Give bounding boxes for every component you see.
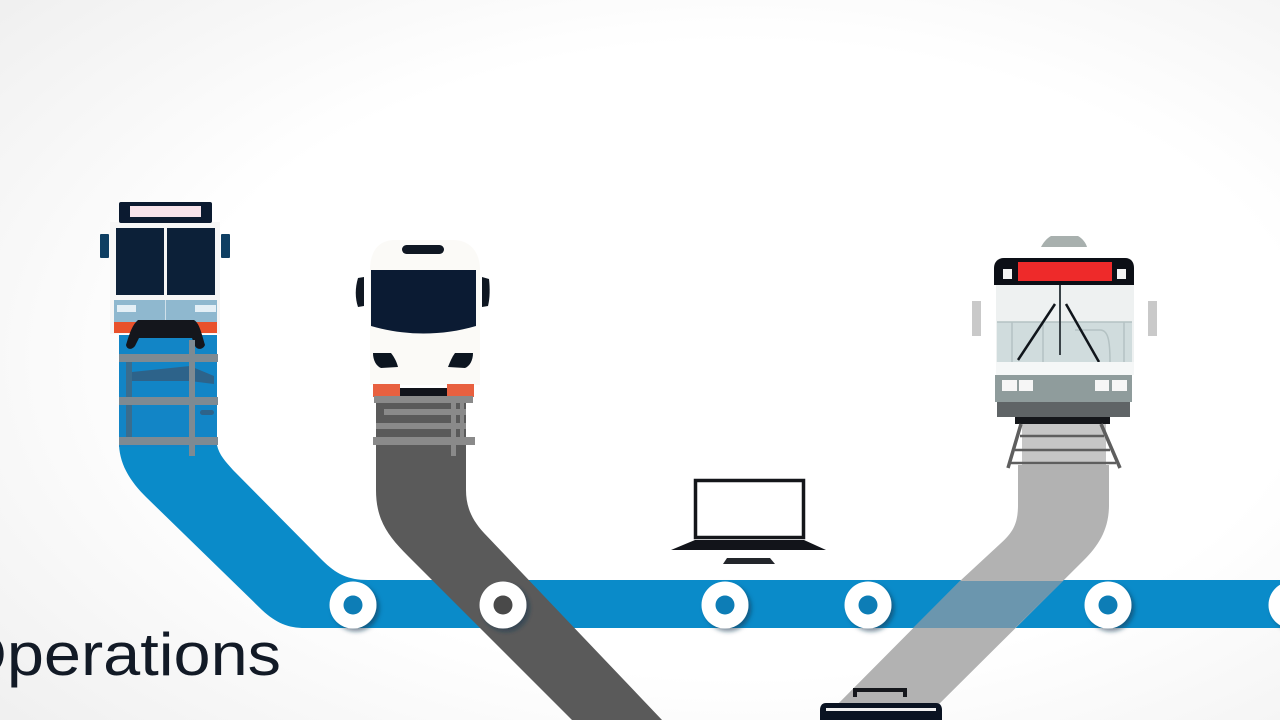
destination sign [119,202,212,223]
route: light grey line [822,424,1109,720]
icon: white coach [356,240,490,456]
station: stop 4 [844,582,892,628]
icon: blue bus [100,202,230,456]
lower panel [114,300,217,322]
front panel [995,375,1132,402]
roof sign [402,245,444,254]
windscreen [371,270,476,334]
headlights [373,353,473,368]
track [1008,424,1120,468]
station: stop 1 [330,582,376,628]
destination sign [994,258,1134,285]
side mirrors [972,301,1157,336]
mirrors [356,277,490,307]
track ties [373,396,475,456]
icon: laptop [671,480,826,564]
station: stop 3 [702,582,748,628]
bumper [126,320,205,349]
route: blue transit line [119,335,1280,628]
tail lights [114,322,217,333]
station: stop 2 [480,582,526,628]
station: stop 6 [1268,582,1280,628]
icon: red-sign tram [972,236,1157,468]
windscreen [116,228,215,295]
route: dark grey line [376,395,662,720]
mirrors [100,234,230,258]
station: stop 5 [1084,582,1132,628]
tail lights and bumper [373,384,474,397]
roof vent [1041,236,1087,247]
track ties [119,340,218,456]
wipers [1018,285,1099,362]
icon: briefcase [820,690,942,720]
bumper [997,402,1130,424]
